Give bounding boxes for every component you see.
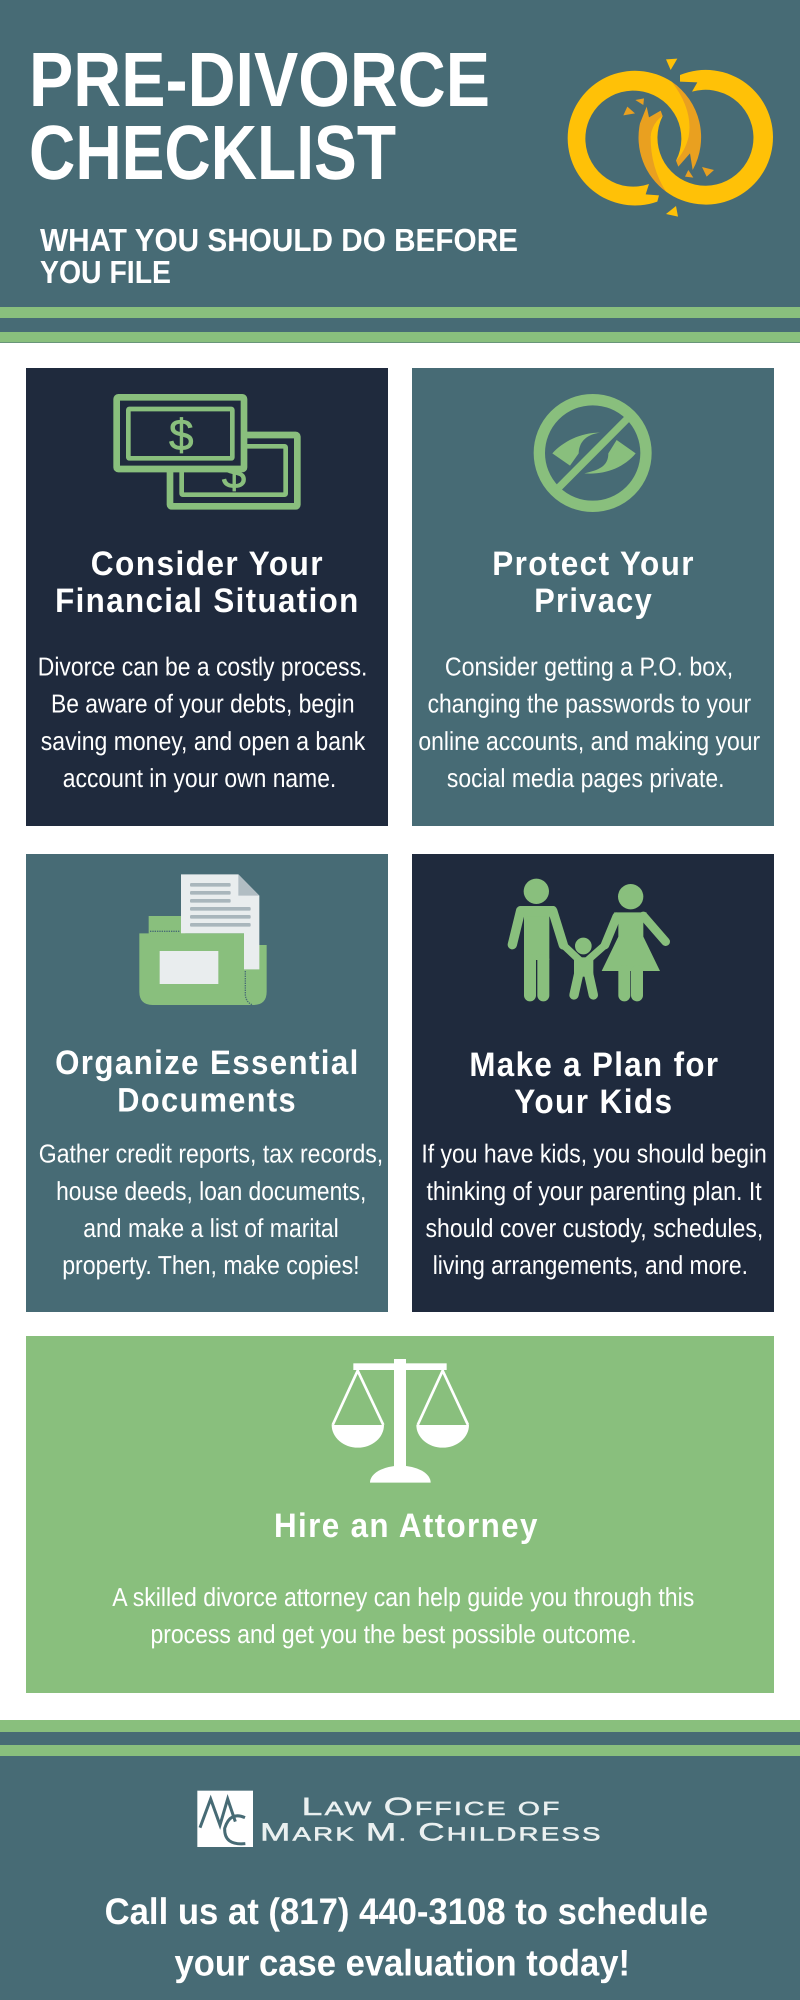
panel: financial situation [26,368,388,826]
law office name [260,1793,603,1847]
body text: process and get you the best possible outcome. [150,1619,637,1649]
body text: changing the passwords to your [428,689,751,719]
body text: property. Then, make copies! [62,1250,360,1280]
body text: social media pages private. [447,763,724,793]
heading: Hire an Attorney [274,1507,539,1545]
body text: A skilled divorce attorney can help guide you through this [112,1582,694,1612]
body text: Gather credit reports, tax records, [39,1139,383,1169]
body text: house deeds, loan documents, [56,1176,366,1206]
body text: Consider getting a P.O. box, [445,652,733,682]
heading: Consider Your [91,545,324,583]
body text: account in your own name. [63,763,336,793]
panel: organize documents [26,854,388,1312]
title: PRE-DIVORCE [29,37,490,123]
heading [55,1044,360,1120]
panel: plan for kids [412,854,774,1312]
logo [197,1791,603,1847]
panel: hire an attorney [26,1336,774,1693]
icon: money bills: $ [169,411,194,460]
heading: Your Kids [514,1083,674,1121]
heading [492,545,695,620]
law office name: L AW O FFICE OF [302,1793,562,1821]
icon: family [512,879,666,995]
icon: money bills [117,397,297,506]
heading: Documents [117,1082,297,1120]
body text [421,1139,767,1280]
panel: protect privacy [412,368,774,826]
call to action: your case evaluation today! [174,1943,630,1984]
heading: Privacy [534,582,653,620]
heading: Protect Your [492,545,695,583]
body text [39,1139,383,1280]
heading: Make a Plan for [469,1046,719,1084]
body text: online accounts, and making your [418,726,760,756]
body text: and make a list of marital [83,1213,339,1243]
title: CHECKLIST [29,110,396,196]
subtitle: WHAT YOU SHOULD DO BEFORE [40,222,518,258]
heading: Organize Essential [55,1044,360,1082]
body text [418,652,760,793]
icon: crossed-out eye [539,400,646,506]
heading [55,545,360,620]
footer [0,1720,800,2000]
body text: Be aware of your debts, begin [51,689,355,719]
icon: scales of justice [332,1359,469,1483]
icon: MC monogram [197,1791,253,1847]
subtitle [40,222,518,290]
body text [38,652,367,793]
body text: thinking of your parenting plan. It [426,1176,762,1206]
call to action: Call us at (817) 440-3108 to schedule [105,1891,708,1932]
body text: living arrangements, and more. [433,1250,748,1280]
body text: should cover custody, schedules, [426,1213,763,1243]
law office name: M ARK M . C HILDRESS [260,1819,603,1847]
heading: Financial Situation [55,582,360,620]
title [29,37,490,196]
heading [469,1046,719,1121]
body text: saving money, and open a bank [41,726,366,756]
icon: money bills: $ [222,449,246,498]
call to action [105,1891,708,1984]
subtitle: YOU FILE [40,254,171,290]
icon: broken wedding rings [568,59,773,217]
icon: folder with papers [139,874,267,1005]
header banner [0,0,800,343]
body text: Divorce can be a costly process. [38,652,367,682]
body text [112,1582,694,1649]
